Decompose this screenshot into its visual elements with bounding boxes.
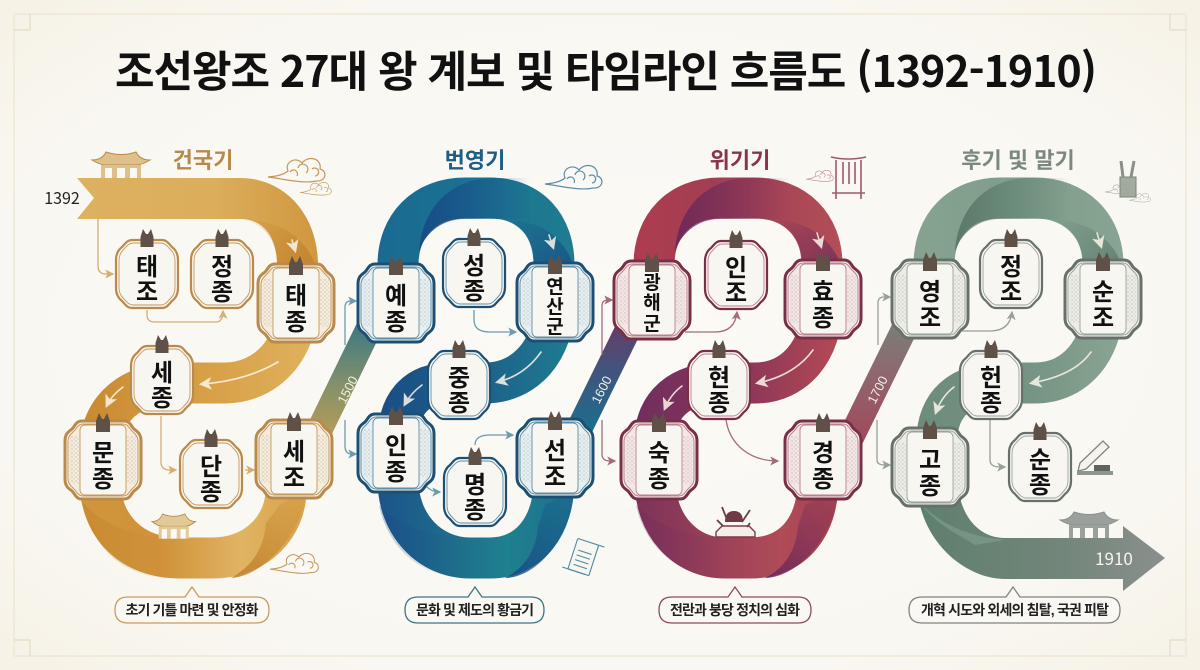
connector ribbon 1600 (559, 295, 645, 470)
node: 효종 (785, 252, 861, 338)
icon: brush and inkstone (1077, 441, 1113, 475)
icon: brush pot and clouds (1105, 161, 1151, 202)
node: 세종 (131, 335, 193, 414)
callout: 건국기 (115, 587, 269, 623)
node: 경종: 경 (812, 440, 834, 467)
node: 영조: 조 (919, 305, 941, 332)
node: 현종: 현 (708, 365, 730, 392)
connector ribbon 1700 (835, 295, 921, 470)
arrows: red flow (602, 233, 821, 461)
icon: cloud (545, 165, 602, 189)
node: 선조: 조 (544, 464, 566, 491)
node: 숙종: 숙 (648, 440, 670, 467)
node: 영조: 영 (919, 279, 941, 306)
node: 인조: 조 (725, 280, 747, 307)
node: 인종: 인 (385, 433, 407, 460)
ribbon: green path (917, 178, 1165, 591)
heading: 후기 및 말기: 후기 및 말기 (961, 148, 1075, 173)
callout: 건국기: 초기 기틀 마련 및 안정화 (126, 602, 259, 618)
node: 연산군: 군 (546, 317, 564, 338)
icon: helmet and weapons (716, 507, 755, 537)
node: 성종: 종 (463, 278, 485, 305)
ribbon: gold path (77, 178, 318, 578)
icon: bell rack (831, 157, 866, 199)
node: 광해군 (614, 253, 690, 339)
node: 순조 (1065, 252, 1141, 338)
node: 태조: 조 (136, 279, 158, 306)
node: 예종: 예 (385, 283, 407, 310)
panel: 후기 및 말기 (877, 148, 1165, 623)
node: 세조: 세 (283, 439, 305, 466)
node: 고종: 고 (919, 447, 941, 474)
ribbon: red path (636, 178, 843, 578)
node: 순조: 조 (1092, 305, 1114, 332)
node: 정조 (980, 229, 1042, 308)
node: 효종: 효 (812, 279, 834, 306)
node: 경종: 종 (812, 466, 834, 493)
node: 성종 (443, 228, 505, 307)
callout: 후기 및 말기 (909, 587, 1120, 623)
node: 선조 (517, 411, 593, 497)
panel: 번영기 (345, 148, 645, 623)
node: 헌종: 헌 (980, 365, 1002, 392)
node: 명종: 종 (464, 497, 486, 524)
heading: 위기기: 위기기 (710, 148, 770, 173)
connector ribbon 1700: 1700 (864, 373, 891, 406)
node: 정종 (191, 229, 253, 308)
node: 인종: 종 (385, 459, 407, 486)
node: 고종: 종 (919, 473, 941, 500)
node: 문종: 문 (92, 440, 114, 467)
callout: 후기 및 말기: 개혁 시도와 외세의 침탈, 국권 피탈 (921, 602, 1109, 618)
node: 중종: 종 (448, 390, 470, 417)
node: 선조: 선 (544, 438, 566, 465)
node: 광해군: 광 (643, 272, 661, 294)
node: 고종 (892, 420, 968, 506)
node: 정종: 정 (211, 254, 233, 281)
node: 현종: 종 (708, 390, 730, 417)
year 1910: 1910 (1095, 545, 1133, 570)
connector ribbon 1500 (300, 295, 385, 470)
node: 인조: 인 (725, 255, 747, 282)
node: 명종: 명 (464, 472, 486, 499)
callout: 위기기 (659, 587, 811, 623)
node: 단종: 종 (200, 479, 222, 506)
node: 태종: 태 (285, 283, 307, 310)
arrows: green flow (877, 233, 1101, 467)
node: 중종 (428, 340, 490, 419)
callout: 위기기: 전란과 붕당 정치의 심화 (670, 602, 800, 618)
node: 현종 (688, 340, 750, 419)
icon: cloud bottom (270, 553, 318, 573)
node: 헌종 (960, 340, 1022, 419)
arrows: blue flow (345, 235, 553, 492)
node: 문종 (65, 413, 141, 499)
node: 광해군: 군 (643, 314, 661, 335)
node: 세종: 세 (151, 360, 173, 387)
node: 태조: 태 (136, 254, 158, 281)
node: 영조 (892, 252, 968, 338)
connector ribbon 1500: 1500 (334, 373, 361, 406)
node: 세조: 조 (283, 465, 305, 492)
node: 인조 (705, 230, 767, 309)
node: 인종 (358, 406, 434, 492)
node: 경종 (785, 413, 861, 499)
node: 중종: 중 (448, 365, 470, 392)
icon: cloud (806, 170, 833, 181)
node: 태조 (116, 229, 178, 308)
node: 순종: 순 (1029, 447, 1051, 474)
node: 성종: 성 (463, 253, 485, 280)
node: 정종: 종 (211, 279, 233, 306)
callout: 번영기 (405, 587, 544, 623)
node: 헌종: 종 (980, 390, 1002, 417)
node: 숙종: 종 (648, 466, 670, 493)
node: 정조: 정 (1000, 254, 1022, 281)
callout: 번영기: 문화 및 제도의 황금기 (416, 602, 534, 618)
node: 연산군: 연 (546, 276, 564, 298)
icon: palace end (1060, 512, 1118, 538)
node: 단종: 단 (200, 454, 222, 481)
node: 예종: 종 (385, 309, 407, 336)
year 1392: 1392 (44, 185, 80, 209)
node: 태종 (258, 256, 334, 342)
icon: palace roof top (92, 152, 150, 178)
connector ribbon 1600: 1600 (588, 373, 615, 406)
node: 순종: 종 (1029, 472, 1051, 499)
node: 연산군: 산 (546, 296, 564, 318)
panel: 위기기 (602, 148, 921, 623)
node: 순종 (1009, 422, 1071, 501)
ribbon: blue path (379, 178, 575, 578)
node: 광해군: 해 (643, 292, 661, 314)
heading: 건국기: 건국기 (173, 148, 233, 173)
node: 숙종 (621, 413, 697, 499)
node: 효종: 종 (812, 305, 834, 332)
node: 태종: 종 (285, 309, 307, 336)
heading: 번영기: 번영기 (445, 148, 505, 173)
icon: pavilion bottom (152, 514, 196, 539)
arrows: gold flow (98, 219, 295, 470)
node: 단종 (180, 429, 242, 508)
node: 순조: 순 (1092, 279, 1114, 306)
node: 세조 (256, 412, 332, 498)
icon: scroll (562, 537, 604, 578)
node: 세종: 종 (151, 385, 173, 412)
node: 연산군 (517, 255, 593, 341)
panel: 건국기 (44, 148, 385, 623)
node: 문종: 종 (92, 466, 114, 493)
title: 조선왕조 27대 왕 계보 및 타임라인 흐름도 (1392-1910) (115, 38, 1097, 100)
icon: clouds (268, 158, 331, 195)
node: 예종 (358, 256, 434, 342)
node: 명종 (444, 447, 506, 526)
node: 정조: 조 (1000, 279, 1022, 306)
